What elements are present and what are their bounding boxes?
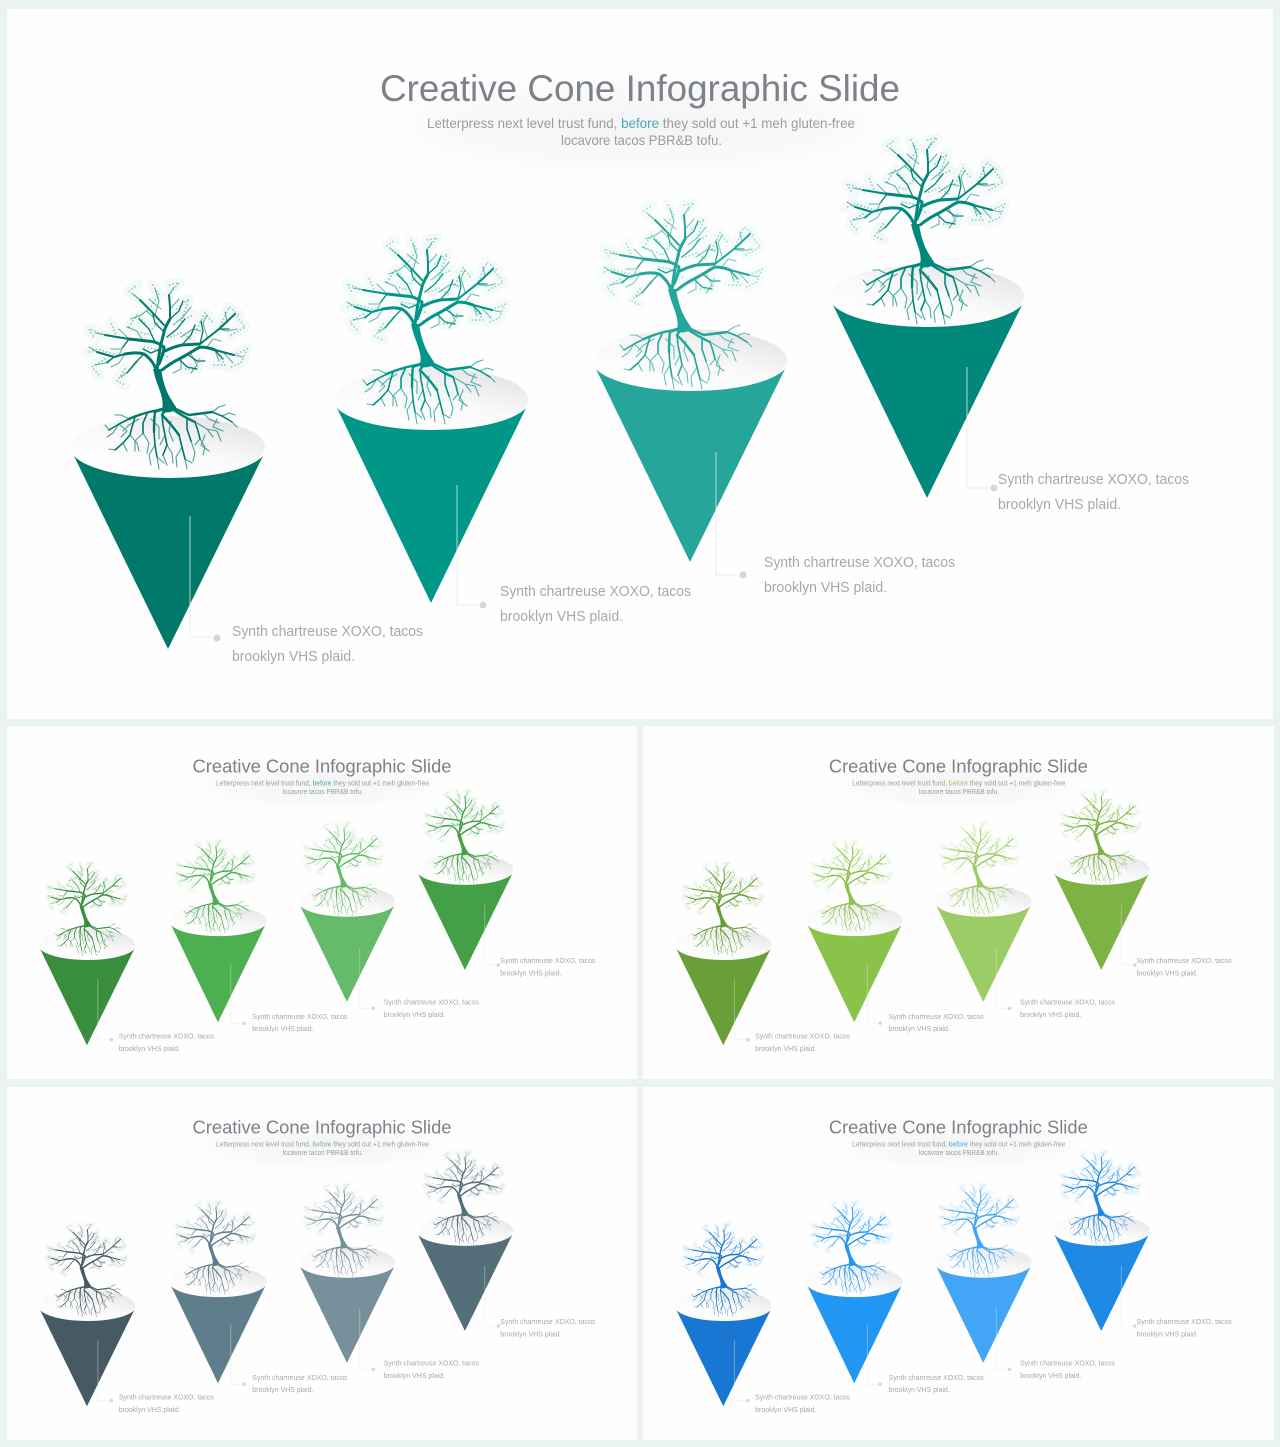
callout 2: Synth chartreuse XOXO, tacos — [252, 1373, 348, 1382]
tree 3 — [303, 823, 383, 916]
callout 4: brooklyn VHS plaid. — [500, 1329, 562, 1338]
callout 3: Synth chartreuse XOXO, tacos — [384, 997, 479, 1006]
callout 1 — [734, 979, 850, 1053]
title haze — [340, 65, 940, 185]
subtitle: locavore tacos PBR&B tofu. — [919, 789, 999, 796]
subtitle — [216, 1142, 429, 1157]
panel: lime slide — [643, 726, 1274, 1079]
title: Creative Cone Infographic Slide — [829, 755, 1088, 776]
subtitle — [852, 781, 1066, 796]
callout 2: Synth chartreuse XOXO, tacos — [889, 1012, 984, 1021]
callout 2: brooklyn VHS plaid. — [500, 608, 623, 625]
tree 3 — [303, 1184, 383, 1277]
callout 4: Synth chartreuse XOXO, tacos — [998, 471, 1189, 488]
tree 4 — [1060, 1152, 1140, 1244]
callout 1: Synth chartreuse XOXO, tacos — [232, 623, 423, 640]
callout 2: brooklyn VHS plaid. — [889, 1024, 950, 1033]
callout 1: brooklyn VHS plaid. — [119, 1044, 180, 1053]
panel: green slide — [7, 726, 637, 1079]
callout 3: Synth chartreuse XOXO, tacos — [764, 554, 955, 571]
subtitle: locavore tacos PBR&B tofu. — [919, 1150, 999, 1157]
callout 3 — [996, 947, 1115, 1019]
subtitle: Letterpress next level trust fund, before they sold out +1 meh gluten-free — [427, 115, 855, 131]
tree 3 — [939, 823, 1019, 916]
cone 1 — [39, 929, 135, 1045]
subtitle: Letterpress next level trust fund, before they sold out +1 meh gluten-free — [852, 781, 1066, 788]
callout 2 — [231, 964, 348, 1033]
tree 1 — [683, 863, 763, 956]
tree 2 — [175, 1202, 255, 1294]
callout 1: brooklyn VHS plaid. — [232, 648, 355, 665]
subtitle: Letterpress next level trust fund, before they sold out +1 meh gluten-free — [216, 1142, 429, 1149]
callout 3: Synth chartreuse XOXO, tacos — [1020, 1358, 1115, 1367]
tree 2 — [811, 841, 891, 933]
callout 3: brooklyn VHS plaid. — [1020, 1371, 1081, 1380]
callout 2: brooklyn VHS plaid. — [889, 1385, 950, 1394]
cone 2 — [334, 368, 528, 603]
title: Creative Cone Infographic Slide — [193, 1116, 452, 1137]
callout 3 — [360, 1308, 479, 1380]
callout 3 — [996, 1308, 1115, 1380]
callout 2: Synth chartreuse XOXO, tacos — [500, 583, 691, 600]
cone 1 — [39, 1290, 135, 1406]
callout 1 — [98, 1340, 214, 1414]
subtitle: locavore tacos PBR&B tofu. — [283, 789, 363, 796]
cone 2 — [806, 1266, 903, 1383]
callout 1: brooklyn VHS plaid. — [755, 1405, 816, 1414]
cone 3 — [935, 1247, 1032, 1363]
callout 1 — [734, 1340, 850, 1414]
tree 4 — [1060, 791, 1140, 883]
callout 1 — [190, 516, 423, 665]
callout 4: brooklyn VHS plaid. — [1137, 968, 1198, 977]
callout 2 — [231, 1325, 348, 1394]
cone 3 — [299, 1247, 395, 1363]
callout 4 — [1121, 1266, 1232, 1338]
cone 3 — [935, 886, 1032, 1002]
cone 2 — [170, 905, 266, 1022]
callout 3: brooklyn VHS plaid. — [764, 579, 887, 596]
cone 1 — [71, 416, 265, 649]
callout 2 — [867, 1325, 984, 1394]
callout 1: Synth chartreuse XOXO, tacos — [119, 1032, 214, 1041]
callout 2 — [867, 964, 984, 1033]
callout 1: Synth chartreuse XOXO, tacos — [755, 1393, 850, 1402]
cone 1 — [675, 929, 772, 1045]
callout 4: brooklyn VHS plaid. — [500, 968, 562, 977]
callout 3: Synth chartreuse XOXO, tacos — [384, 1358, 479, 1367]
callout 4 — [485, 905, 596, 977]
subtitle: locavore tacos PBR&B tofu. — [283, 1150, 363, 1157]
cone 4 — [830, 265, 1024, 498]
title: Creative Cone Infographic Slide — [193, 755, 452, 776]
tree 3 — [939, 1184, 1019, 1277]
tree 1 — [683, 1224, 763, 1317]
subtitle: Letterpress next level trust fund, before they sold out +1 meh gluten-free — [852, 1142, 1066, 1149]
tree 4 — [424, 791, 504, 883]
callout 1: Synth chartreuse XOXO, tacos — [119, 1393, 214, 1402]
cone 2 — [806, 905, 903, 1022]
callout 4: Synth chartreuse XOXO, tacos — [1137, 956, 1232, 965]
cone 3 — [299, 886, 395, 1002]
subtitle: Letterpress next level trust fund, before they sold out +1 meh gluten-free — [216, 781, 429, 788]
callout 4 — [1121, 905, 1232, 977]
callout 3: brooklyn VHS plaid. — [1020, 1010, 1081, 1019]
callout 3: brooklyn VHS plaid. — [384, 1371, 445, 1380]
callout 3: Synth chartreuse XOXO, tacos — [1020, 997, 1115, 1006]
callout 1: Synth chartreuse XOXO, tacos — [755, 1032, 850, 1041]
panel: slate slide — [7, 1087, 637, 1440]
panel: blue slide — [643, 1087, 1274, 1440]
tree 1 — [87, 283, 247, 469]
callout 4: Synth chartreuse XOXO, tacos — [500, 1317, 596, 1326]
callout 2: brooklyn VHS plaid. — [252, 1024, 314, 1033]
cone 4 — [1053, 854, 1150, 970]
tree 2 — [345, 238, 505, 424]
cone 4 — [417, 1215, 513, 1331]
callout 1 — [98, 979, 214, 1053]
cone 4 — [1053, 1215, 1150, 1331]
subtitle: locavore tacos PBR&B tofu. — [561, 132, 722, 148]
callout 2: Synth chartreuse XOXO, tacos — [252, 1012, 348, 1021]
cone 1 — [675, 1290, 772, 1406]
callout 3 — [360, 947, 479, 1019]
tree 2 — [175, 841, 255, 933]
cone 4 — [417, 854, 513, 970]
callout 4: brooklyn VHS plaid. — [998, 496, 1121, 513]
panel: large teal slide — [7, 9, 1273, 719]
callout 4: Synth chartreuse XOXO, tacos — [1137, 1317, 1232, 1326]
callout 2: brooklyn VHS plaid. — [252, 1385, 314, 1394]
callout 4: Synth chartreuse XOXO, tacos — [500, 956, 596, 965]
tree 1 — [47, 1224, 126, 1317]
callout 1: brooklyn VHS plaid. — [119, 1405, 180, 1414]
cone 3 — [593, 329, 787, 562]
tree 4 — [424, 1152, 504, 1244]
subtitle — [427, 115, 855, 148]
subtitle — [216, 781, 429, 796]
callout 4: brooklyn VHS plaid. — [1137, 1329, 1198, 1338]
callout 1: brooklyn VHS plaid. — [755, 1044, 816, 1053]
callout 2: Synth chartreuse XOXO, tacos — [889, 1373, 984, 1382]
tree 1 — [47, 863, 126, 956]
callout 4 — [967, 367, 1189, 513]
cone 2 — [170, 1266, 266, 1383]
title: Creative Cone Infographic Slide — [829, 1116, 1088, 1137]
subtitle — [852, 1142, 1066, 1157]
tree 4 — [845, 138, 1005, 324]
tree 2 — [811, 1202, 891, 1294]
callout 4 — [485, 1266, 596, 1338]
callout 3: brooklyn VHS plaid. — [384, 1010, 445, 1019]
callout 3 — [716, 452, 955, 596]
title: Creative Cone Infographic Slide — [380, 68, 900, 109]
tree 3 — [602, 203, 762, 389]
callout 2 — [457, 485, 691, 625]
